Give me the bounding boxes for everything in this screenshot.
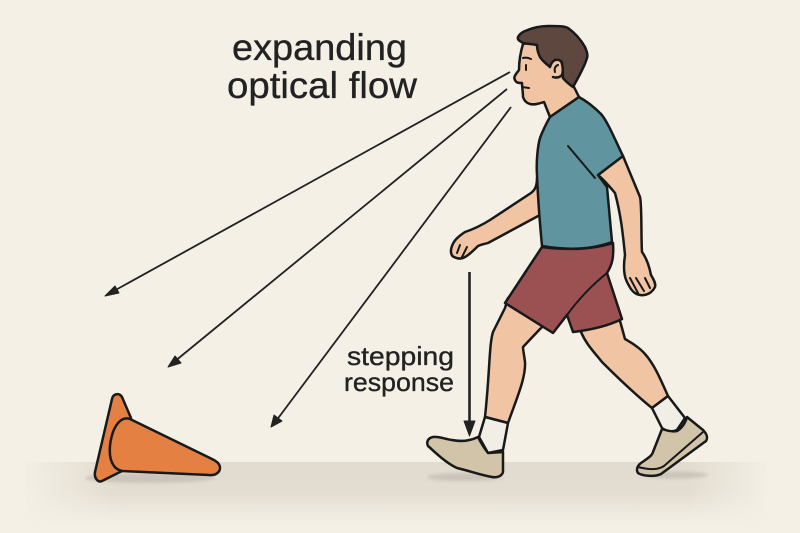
title: expanding optical flow: expanding bbox=[232, 27, 407, 68]
arrow 1 bbox=[105, 72, 510, 296]
stepping response arrow bbox=[464, 272, 475, 436]
neck and face bbox=[514, 40, 579, 117]
hair bbox=[518, 26, 587, 87]
front leg bbox=[485, 298, 550, 423]
front shoe bbox=[427, 437, 503, 477]
ear detail bbox=[555, 65, 558, 72]
walking person bbox=[427, 26, 707, 477]
back leg bbox=[580, 310, 668, 408]
back shoe bbox=[637, 417, 707, 476]
ground band bbox=[54, 462, 740, 513]
back sock bbox=[652, 396, 685, 431]
shorts bbox=[505, 243, 622, 333]
front sock bbox=[479, 417, 508, 453]
arrow 2 bbox=[168, 89, 507, 367]
title: expanding optical flow: optical flow bbox=[227, 65, 417, 106]
ground shadows bbox=[85, 472, 708, 483]
label: stepping response: response bbox=[344, 367, 454, 397]
cone base bbox=[95, 394, 131, 481]
title: expanding optical flow bbox=[227, 27, 417, 106]
label: stepping response: stepping bbox=[347, 341, 454, 371]
near arm bbox=[598, 156, 655, 295]
optical flow arrows bbox=[105, 72, 511, 427]
shirt bbox=[537, 97, 623, 249]
mouth bbox=[522, 87, 529, 88]
cone body bbox=[110, 418, 220, 475]
arrow 3 bbox=[271, 107, 511, 427]
far arm bbox=[451, 178, 540, 258]
eye bbox=[523, 58, 531, 70]
label: stepping response bbox=[344, 341, 454, 397]
traffic cone bbox=[95, 394, 220, 481]
ear bbox=[550, 60, 563, 78]
